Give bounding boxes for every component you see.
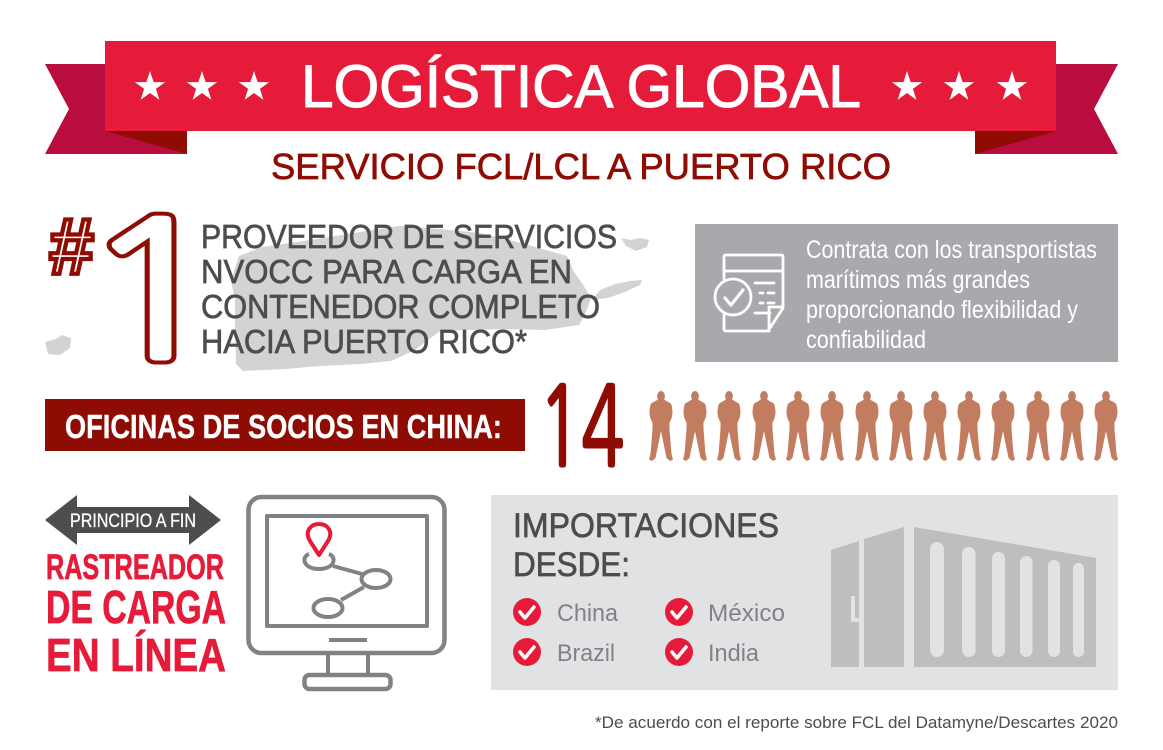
- line 2: DE CARGA: [46, 581, 226, 633]
- carriers text: marítimos más grandes: [806, 266, 1030, 294]
- monitor screen: [267, 516, 427, 626]
- Brazil item: [513, 638, 615, 667]
- double arrow: end to end: [45, 495, 221, 545]
- panel background: [695, 224, 1118, 362]
- footnote: *De acuerdo con el reporte sobre FCL del Datamyne/Descartes 2020: [595, 714, 1118, 732]
- right stars: [892, 71, 1027, 100]
- number of offices: 14: [539, 373, 624, 481]
- number one badge: [49, 197, 226, 386]
- banner right fold: [975, 131, 1056, 154]
- banner left tail: [45, 64, 187, 154]
- provider statement: [201, 218, 617, 360]
- Vieques: [592, 280, 642, 300]
- arrow label: PRINCIPIO A FIN: [70, 511, 196, 532]
- bar background: [45, 399, 525, 451]
- bar label: OFICINAS DE SOCIOS EN CHINA:: [65, 408, 502, 445]
- panel heading: DESDE:: [513, 546, 630, 584]
- route nodes: [304, 554, 390, 617]
- icon: shipping container: [831, 527, 1096, 667]
- Brazil item: Brazil: [557, 640, 615, 667]
- Mona: [45, 335, 71, 355]
- icon: monitor with tracking route: [248, 497, 444, 689]
- panel: imports: [491, 495, 1118, 690]
- carriers text: proporcionando flexibilidad y: [806, 296, 1078, 324]
- carriers text: [806, 236, 1097, 354]
- panel background: [491, 495, 1118, 690]
- icon: location pin: [308, 524, 330, 555]
- India item: [665, 638, 760, 667]
- line 4: HACIA PUERTO RICO*: [201, 323, 527, 360]
- line 2: NVOCC PARA CARGA EN: [201, 253, 572, 290]
- Culebra: [621, 238, 649, 251]
- subtitle: SERVICIO FCL/LCL A PUERTO RICO: [271, 146, 891, 187]
- banner left fold: [105, 131, 187, 154]
- México item: [665, 598, 785, 627]
- main island: [231, 226, 591, 371]
- line 3: CONTENEDOR COMPLETO: [201, 288, 600, 325]
- line 3: EN LÍNEA: [46, 629, 226, 681]
- México item: México: [708, 600, 785, 627]
- India item: India: [708, 640, 760, 667]
- outlined numeral 1: 1: [80, 197, 226, 386]
- banner right tail: [975, 64, 1118, 154]
- monitor base: [304, 675, 390, 689]
- line 1: PROVEEDOR DE SERVICIOS: [201, 218, 617, 255]
- banner ribbon: [105, 41, 1056, 131]
- icon row: people: [649, 391, 1118, 461]
- carriers text: Contrata con los transportistas: [806, 236, 1097, 264]
- carriers text: confiabilidad: [806, 326, 926, 354]
- icon: contract with check: [715, 255, 783, 331]
- China item: China: [557, 600, 619, 627]
- China item: [513, 598, 619, 627]
- map of Puerto Rico: [45, 226, 649, 371]
- monitor body: [248, 497, 444, 653]
- title banner: [45, 41, 1118, 154]
- offices bar: [45, 399, 525, 451]
- hash sign: #: [49, 202, 94, 291]
- panel heading: IMPORTACIONES: [513, 507, 779, 545]
- panel heading: [513, 507, 779, 584]
- outlined numeral 1: 1: [80, 197, 226, 386]
- line 1: RASTREADOR: [46, 548, 224, 587]
- panel: carriers: [695, 224, 1118, 362]
- online cargo tracker heading: [46, 548, 226, 681]
- monitor details and stand: [328, 640, 368, 676]
- arrow shape: [45, 495, 221, 545]
- title: LOGÍSTICA GLOBAL: [301, 53, 861, 120]
- left stars: [135, 71, 269, 100]
